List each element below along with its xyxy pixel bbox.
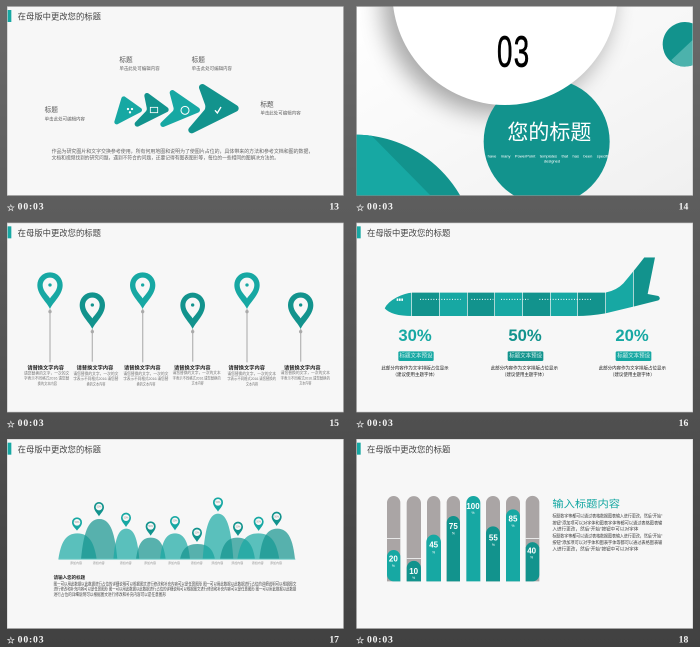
label: right: 标题 [260,100,274,109]
icon: picture [150,107,158,113]
chart markers [72,497,282,542]
bar 45: 45 [429,540,439,549]
chart markers: 50% [124,517,128,519]
label: top left: 标题 [119,55,133,64]
pin caption 6: 文本内容 [299,380,311,386]
chart text: 标题数字等都可以通过表格数据图表输入进行更改，然后“开始” [552,513,663,520]
footer: slide 14: ☆ [356,203,364,214]
icon: globe [181,106,189,114]
bar 55 [486,496,500,581]
text block: 请输入您的标题 [54,574,86,581]
axis labels: 添加内容 [270,560,282,565]
pin caption 6: 字表示不同格式2016.请您替换的 [281,374,330,380]
teal circle [484,84,610,196]
pin caption 5: 请替换文字内容 [228,363,265,371]
chart heading: 输入标题内容 [552,497,620,510]
title accent bar [8,443,11,455]
pin column 5 [234,272,260,362]
footer: slide 17 [7,634,339,647]
axis labels: 添加内容 [93,560,105,565]
large white circle [392,0,618,105]
section heading: 您的标题 [507,121,591,144]
footer: slide 16: 16 [679,418,689,429]
label: top left [119,55,160,72]
icon: check [215,107,221,113]
panel: slide 17 hills chart [7,439,343,647]
section number: 03 [497,27,530,76]
label: left: 单击此处可编辑内容 [45,116,86,123]
chart markers: 50% [216,502,220,504]
panel: slide 14 section cover [350,0,700,214]
label: top left: 单击此处可编辑内容 [119,65,160,72]
circle shadow [382,0,612,113]
text block: 图一可以用此数据以此数据进行占位的详细说明可以根据图文进行修改和补充内容可以是任意图形 图一可以用此数据以此数据进行占位的详细说明可以根据图文 [54,580,297,587]
footer: slide 15: 15 [329,418,339,429]
label: right: 单击此处可编辑内容 [260,110,301,117]
stat 20%: （建议使用主题字体） [610,371,655,378]
stat 30%: 标题文本预设 [400,352,433,360]
axis labels: 添加内容 [231,560,243,565]
bar 10: 10 [409,567,419,576]
section subtitle: We have many PowerPoint templates that has been specifically [477,153,616,158]
axis labels: 添加内容 [191,560,203,565]
slide title: 在母版中更改您的标题 [18,444,102,454]
pin caption 1: 请替换文字内容 [27,363,64,371]
stat 30%: 此部分内容作为文字排版占位显示 [381,364,449,371]
footer: slide 18: 18 [679,634,689,645]
icon: share [127,108,133,113]
pin caption 5: 字表示不同格式2016.请您替换的 [227,375,276,381]
panel: slide 13 arrows [7,7,343,214]
pin caption 5 [227,363,276,386]
stat 50%: （建议使用主题字体） [502,371,547,378]
bar 100: % [472,511,475,515]
airplane graphic [380,255,664,318]
pin caption 2: 字表示不同格式2016.请您替 [73,375,118,381]
pin caption 2: 换的文本内容 [87,380,105,386]
pin caption 3: 请替换文字内容 [124,363,161,371]
footer: slide 13: ☆ [7,203,15,214]
bar 75: % [452,531,455,535]
body text: 作品为研究图片和文字交换参考使用，所有何用地图和说明为了使图片占位的，具体带来的方法和参考文档和图的数据， [52,148,313,155]
footer: slide 17: 00:03 [18,634,44,645]
pin caption 1: 请您替换的文字，一次的文 [24,369,69,375]
footer: slide 13: 00:03 [18,202,44,213]
pin caption 3: 字表示不同格式2016.请您替 [123,375,168,381]
footer: slide 15: 00:03 [18,418,44,429]
label: right [260,100,301,117]
chart markers: 50% [75,522,79,524]
pin caption 3: 换的文本内容 [137,380,155,386]
pin caption 2: 请您替换的文字，一次的文 [73,370,118,376]
chart markers: 50% [97,507,101,509]
pin caption 6 [281,363,330,386]
hills area chart [58,514,295,559]
footer: slide 18: 00:03 [367,634,394,645]
bar 20 [387,496,400,581]
label: top right: 单击此处可编辑内容 [192,65,233,72]
bar 75 [447,496,460,581]
stat 50%: 50% [508,326,542,345]
chart markers: 50% [148,526,153,528]
stat 30% [381,326,449,378]
bar 55: 55 [489,534,498,543]
footer: slide 18 [356,634,689,647]
pin column 6 [288,292,313,362]
bar 85 [506,496,520,581]
body text [52,148,313,161]
section subtitle: designed [544,159,560,164]
title accent bar [8,10,11,22]
pin column 3 [130,272,155,362]
panel: slide 15 location pins [7,223,343,430]
chart text: 按钮”添加项可以对字体和图表字体等都可以通过表格图表输 [552,519,662,526]
footer: slide 16 [356,418,689,430]
bar 40 [526,496,539,581]
pin caption 4: 请您替换的文字，一次的文本 [173,369,221,375]
stat 50%: 标题文本预设 [509,352,543,360]
chart markers: 50% [173,521,177,523]
stat 20%: 此部分内容作为文字排版占位显示 [599,364,666,371]
stat 30%: （建议使用主题字体） [393,371,437,378]
footer: slide 13 [7,202,339,214]
axis labels: 添加内容 [120,560,132,565]
footer: slide 17: ☆ [7,636,15,647]
footer: slide 18: ☆ [356,636,364,647]
body text: 文档和视频找到的研究问题，遇到不符合的问题，还要记得有图表图形等，每位的一些相同的图解决方法的。 [52,154,279,161]
stat 20%: 标题文本预设 [617,352,651,360]
pin caption 4: 文本内容 [192,380,204,386]
bar 100: 100 [466,502,480,511]
bar 85: 85 [509,515,518,524]
footer: slide 15 [7,418,339,430]
bar 45 [426,496,441,581]
pin caption 1: 字表示不同格式2016.请您替 [24,375,69,381]
chart text: 标题数字等都可以通过表格数据图表输入进行更改，然后“开始” [552,532,663,539]
footer: slide 14: 14 [679,202,689,213]
bar 20: 20 [389,555,398,564]
stat 20%: 20% [615,326,649,345]
chart markers: 50% [236,526,240,528]
label: left [45,105,86,123]
bar 55: % [492,543,495,547]
cockpit window [397,296,404,303]
pin caption 1 [24,363,69,386]
slide title: 在母版中更改您的标题 [367,228,451,238]
pin caption 3 [123,363,168,386]
title accent bar [357,443,361,455]
upper right circle [662,22,693,67]
axis labels: 添加内容 [168,560,180,565]
title accent bar [8,226,11,238]
panel: slide 16 airplane [356,223,693,430]
bar 40: % [530,556,533,560]
pin caption 3: 请您替换的文字，一次的文 [123,370,168,376]
bar 85: % [512,524,515,528]
pin column 4 [180,293,205,362]
slide title: 在母版中更改您的标题 [18,12,102,22]
footer: slide 16: 00:03 [367,418,394,429]
airplane windows [420,298,593,301]
bar 40: 40 [527,546,537,555]
pin column 2 [80,292,105,362]
chart markers: 50% [195,532,199,534]
text block: 进行修改和补充内容可以是任意图形 图一可以用此数据以此数据进行占位的详细说明可以根据图文进行修改和补充内容可以是任意图形 图一可以用此数据以此数据 [54,586,297,593]
footer: slide 13: 13 [329,202,339,213]
bar 20: % [392,564,395,568]
bar 45: % [432,550,435,554]
footer: slide 17: 17 [329,634,339,645]
text block [54,574,297,598]
pin caption 4: 字表示不同格式2016.请您替换的 [173,374,221,380]
pin caption 5: 文本内容 [246,380,258,386]
footer: slide 14: 00:03 [367,202,394,213]
pin caption 2 [73,363,118,386]
footer: slide 15: ☆ [7,419,15,430]
section subtitle [488,155,608,164]
stat 50% [491,326,558,378]
axis labels [70,560,282,565]
chart text [552,513,663,552]
chart text: 按钮”添加项可以对字体和图表字体等都可以通过表格图表输 [552,539,662,546]
stat 20% [599,326,666,378]
stat 30%: 30% [398,326,432,345]
slide title: 在母版中更改您的标题 [367,444,451,454]
chart base line [59,558,295,561]
pin caption 6: 请您替换的文字，一次的文本 [281,369,330,375]
lower left circle [356,134,460,196]
axis labels: 添加内容 [252,560,264,565]
bar 75: 75 [449,522,458,531]
text block: 进行占位的详细说明可以根据图文进行修改和补充内容可以是任意图形 [54,591,167,598]
axis labels: 添加内容 [144,560,156,565]
arrow chain [117,87,235,130]
slide title: 在母版中更改您的标题 [18,228,102,238]
axis labels: 添加内容 [211,560,223,565]
title accent bar [357,226,361,238]
bar 10 [407,496,421,581]
axis labels: 添加内容 [70,560,82,565]
stat 50%: 此部分内容作为文字排版占位显示 [491,364,558,371]
chart markers: 50% [256,521,261,523]
pin caption 4: 请替换文字内容 [174,363,211,371]
pin column 1 [37,272,63,362]
pin caption 5: 请您替换的文字，一次的文本 [227,370,276,376]
pin caption 4 [173,363,221,386]
pin caption 1: 换的文本内容 [38,380,57,386]
pin caption 6: 请替换文字内容 [284,363,321,371]
pin caption 2: 请替换文字内容 [77,363,113,371]
chart text: 入进行更改，然后“开始”按钮中可以对字体 [552,545,638,552]
bar 10: % [412,576,415,580]
panel: slide 18 bar chart [356,439,693,647]
chart text: 入进行更改，然后“开始”按钮中可以对字体 [552,526,638,533]
footer: slide 16: ☆ [356,419,364,430]
label: left: 标题 [45,105,58,114]
footer: slide 14 [356,202,689,214]
label: top right [192,55,233,72]
bar 100 [466,496,480,581]
label: top right: 标题 [192,55,205,64]
chart markers: 50% [274,516,279,518]
